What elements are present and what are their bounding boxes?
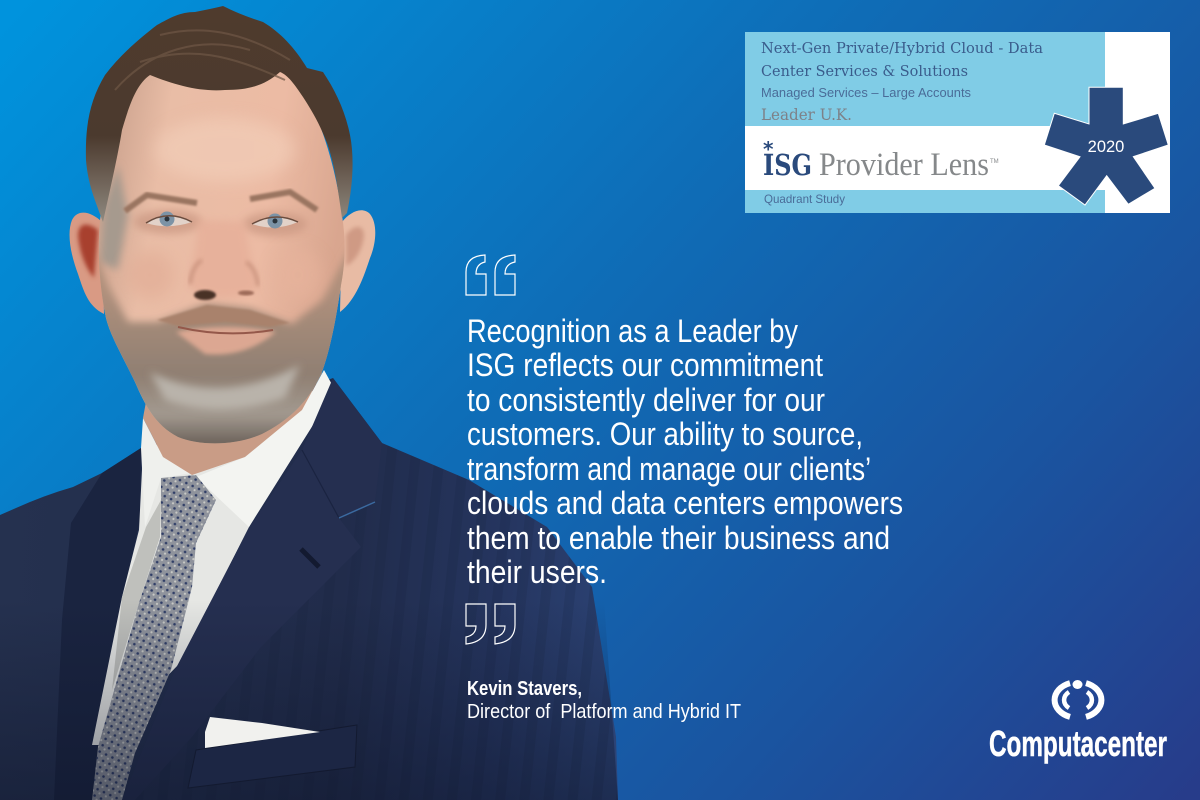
bottom suit shading bbox=[0, 600, 618, 800]
Computacenter logo bbox=[989, 680, 1167, 764]
quote text: customers. Our ability to source, bbox=[467, 416, 863, 452]
beard bbox=[99, 254, 344, 444]
logo symbol bbox=[1055, 680, 1101, 717]
ear right bbox=[340, 210, 375, 312]
attribution name: Kevin Stavers, bbox=[467, 678, 582, 700]
hair bbox=[86, 6, 353, 222]
suit stripes bbox=[135, 443, 618, 800]
badge subtitle: Managed Services – Large Accounts bbox=[761, 86, 971, 100]
opening quote mark bbox=[466, 255, 515, 295]
left jacket dark lapel bbox=[54, 448, 141, 800]
quote text: clouds and data centers empowers bbox=[467, 485, 903, 521]
lip area bbox=[176, 327, 276, 355]
closing quote mark bbox=[466, 604, 515, 644]
Provider Lens: Provider Lens bbox=[819, 147, 989, 183]
quote text: ISG reflects our commitment bbox=[467, 347, 823, 383]
shirt shadow bbox=[112, 500, 161, 690]
shirt collar right bbox=[196, 370, 335, 527]
chest pocket bbox=[188, 725, 357, 788]
quote text: them to enable their business and bbox=[467, 520, 890, 556]
badge bottom band bbox=[745, 190, 1105, 213]
eye left bbox=[146, 212, 192, 226]
ISG wordmark: ISG bbox=[763, 148, 812, 182]
cheek warm right bbox=[274, 249, 322, 301]
cheek warm left bbox=[136, 257, 168, 293]
badge title line 2: Center Services & Solutions bbox=[761, 62, 968, 80]
nose bbox=[188, 220, 258, 300]
ISG asterisk: * bbox=[763, 137, 774, 161]
suit jacket bbox=[0, 378, 618, 800]
quote text: to consistently deliver for our bbox=[467, 382, 825, 418]
face bbox=[99, 55, 345, 443]
Quadrant Study: Quadrant Study bbox=[764, 192, 845, 206]
eye socket shade right bbox=[243, 212, 307, 236]
neck bbox=[143, 360, 322, 475]
lapel notch edge bbox=[339, 502, 375, 518]
eye socket shade left bbox=[134, 210, 202, 234]
trademark: TM bbox=[990, 159, 999, 165]
lapel buttonhole bbox=[301, 549, 319, 567]
shirt collar left bbox=[141, 418, 192, 527]
quote text bbox=[467, 313, 903, 590]
pocket square bbox=[205, 717, 320, 748]
quote text: transform and manage our clients’ bbox=[467, 451, 871, 487]
forehead highlight bbox=[160, 120, 293, 180]
star year: 2020 bbox=[1088, 138, 1124, 156]
tie bbox=[92, 475, 216, 800]
chin grey bbox=[150, 365, 300, 410]
eyebrow right bbox=[250, 192, 317, 210]
star bbox=[1044, 87, 1168, 205]
badge title line 1: Next-Gen Private/Hybrid Cloud - Data bbox=[761, 39, 1043, 57]
hair highlights bbox=[115, 30, 290, 90]
left temple shade bbox=[100, 165, 128, 270]
face shading and beard bbox=[92, 118, 352, 450]
moustache bbox=[157, 305, 290, 327]
badge top band bbox=[745, 32, 1105, 126]
ISG badge bbox=[745, 32, 1170, 213]
collar lapel seam bbox=[302, 450, 339, 518]
attribution role: Director of Platform and Hybrid IT bbox=[467, 701, 741, 723]
mouth bbox=[178, 327, 273, 333]
badge leader: Leader U.K. bbox=[761, 106, 852, 124]
ear left bbox=[70, 213, 104, 314]
eye right bbox=[252, 214, 298, 228]
eyebrow left bbox=[125, 195, 197, 211]
shirt bbox=[92, 385, 330, 745]
right lapel bbox=[122, 378, 382, 800]
quote text: Recognition as a Leader by bbox=[467, 313, 798, 349]
badge white base bbox=[745, 32, 1170, 213]
quote text: their users. bbox=[467, 554, 607, 590]
portrait: man in navy suit bbox=[0, 6, 618, 800]
